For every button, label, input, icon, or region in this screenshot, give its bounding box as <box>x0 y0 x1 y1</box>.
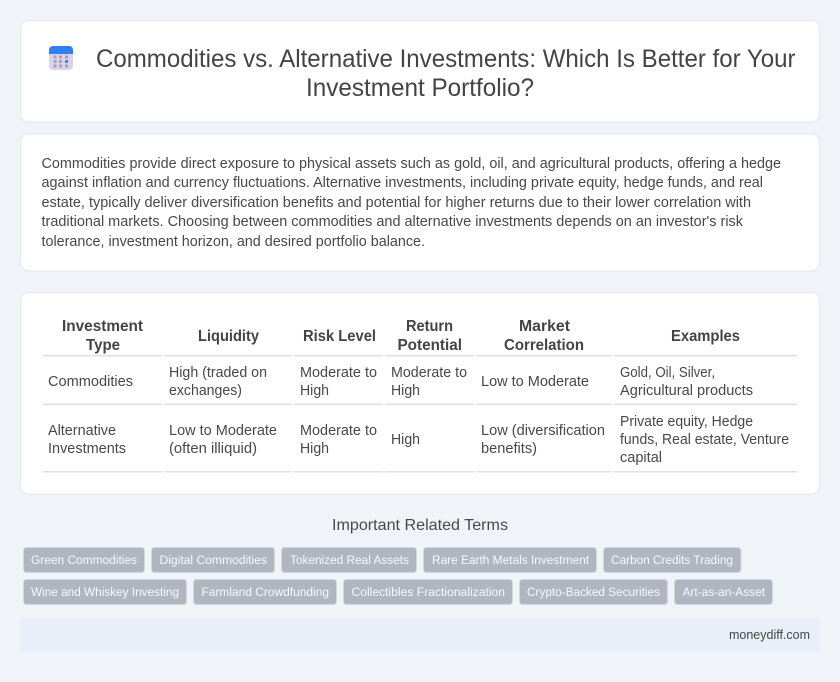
table row: alternative investments: Low to Moderate <box>169 423 277 439</box>
panel: introduction <box>20 134 820 271</box>
table header row: Risk Level <box>303 328 376 345</box>
table header row: Liquidity <box>198 328 259 345</box>
table row: alternative investments: Investments <box>48 441 126 457</box>
tag: farmland crowdfunding <box>194 580 336 604</box>
table row: alternative investments: Alternative <box>48 423 116 439</box>
table header row: Examples <box>671 328 740 345</box>
icon: calendar <box>49 46 73 70</box>
tag: rare earth metals investment: Rare Earth Metals Investment <box>432 553 590 567</box>
table header row: Market <box>519 318 571 335</box>
table row: alternative investments: (often illiquid) <box>169 441 257 457</box>
table row: commodities: Low to Moderate <box>481 374 589 390</box>
tag: collectibles fractionalization: Collectibles Fractionalization <box>352 585 505 599</box>
table header row: Correlation <box>504 337 584 354</box>
title <box>96 45 796 102</box>
table row: commodities: High <box>391 383 420 399</box>
intro text block <box>42 156 781 250</box>
intro text block: Commodities provide direct exposure to physical assets such as gold, oil, and agricultural products, offering a hedge <box>42 156 781 172</box>
table row: alternative investments <box>48 414 789 466</box>
table row: commodities <box>48 365 753 399</box>
table row: alternative investments: Moderate to <box>300 423 377 439</box>
tag: green commodities: Green Commodities <box>31 553 137 567</box>
tag: rare earth metals investment <box>424 548 596 572</box>
tag: art-as-an-asset <box>674 580 772 604</box>
tag: green commodities <box>24 548 144 572</box>
intro text block: tolerance, investment horizon, and desired portfolio balance. <box>42 234 425 250</box>
footer: moneydiff.com <box>729 627 810 642</box>
tag: art-as-an-asset: Art-as-an-Asset <box>682 585 766 599</box>
table row: commodities: Agricultural products <box>620 383 753 399</box>
table row: alternative investments: Private equity, Hedge <box>620 414 753 430</box>
heading: important related terms: Important Related Terms <box>332 517 508 534</box>
panel: comparison table <box>20 292 820 494</box>
tag: carbon credits trading: Carbon Credits Trading <box>611 553 733 567</box>
tag group: related terms <box>24 548 772 604</box>
table row: commodities: High <box>300 383 329 399</box>
table header row: Investment <box>62 318 144 335</box>
tag: crypto-backed securities <box>520 580 668 604</box>
intro text block: against inflation and currency fluctuations. Alternative investments, including private equity, hedge funds, and real <box>42 175 763 191</box>
table row: alternative investments: Low (diversification <box>481 423 605 439</box>
tag: digital commodities <box>152 548 274 572</box>
table header row: Potential <box>398 337 462 354</box>
table row: commodities: Gold, Oil, Silver, <box>620 365 715 381</box>
table header row <box>62 318 740 354</box>
panel: header <box>20 20 820 122</box>
tag: wine and whiskey investing: Wine and Whiskey Investing <box>31 585 179 599</box>
table header row: Return <box>406 318 453 335</box>
tag: tokenized real assets: Tokenized Real Assets <box>290 553 409 567</box>
table row: commodities: Moderate to <box>300 365 377 381</box>
table row: commodities: Commodities <box>48 374 133 390</box>
table row: alternative investments: High <box>300 441 329 457</box>
table row: commodities: High (traded on <box>169 365 267 381</box>
table row: commodities: Moderate to <box>391 365 467 381</box>
tag: wine and whiskey investing <box>24 580 186 604</box>
footer <box>20 618 820 652</box>
table row: alternative investments: benefits) <box>481 441 537 457</box>
table row: commodities: exchanges) <box>169 383 242 399</box>
table row: alternative investments: High <box>391 432 420 448</box>
intro text block: estate, typically deliver diversification benefits and potential for higher returns due to their lower correlation with <box>42 195 751 211</box>
tag: tokenized real assets <box>282 548 416 572</box>
table row: alternative investments: capital <box>620 450 662 466</box>
intro text block: traditional markets. Choosing between commodities and alternative investments depends on an investor's risk <box>42 214 744 230</box>
table header row: Type <box>86 337 120 354</box>
tag: farmland crowdfunding: Farmland Crowdfunding <box>202 585 329 599</box>
tag: digital commodities: Digital Commodities <box>160 553 267 567</box>
tag: carbon credits trading <box>604 548 741 572</box>
table row: alternative investments: funds, Real estate, Venture <box>620 432 789 448</box>
tag: crypto-backed securities: Crypto-Backed Securities <box>527 585 660 599</box>
tag: collectibles fractionalization <box>344 580 512 604</box>
title: Commodities vs. Alternative Investments: Which Is Better for Your <box>96 45 796 73</box>
title: Investment Portfolio? <box>306 74 534 102</box>
